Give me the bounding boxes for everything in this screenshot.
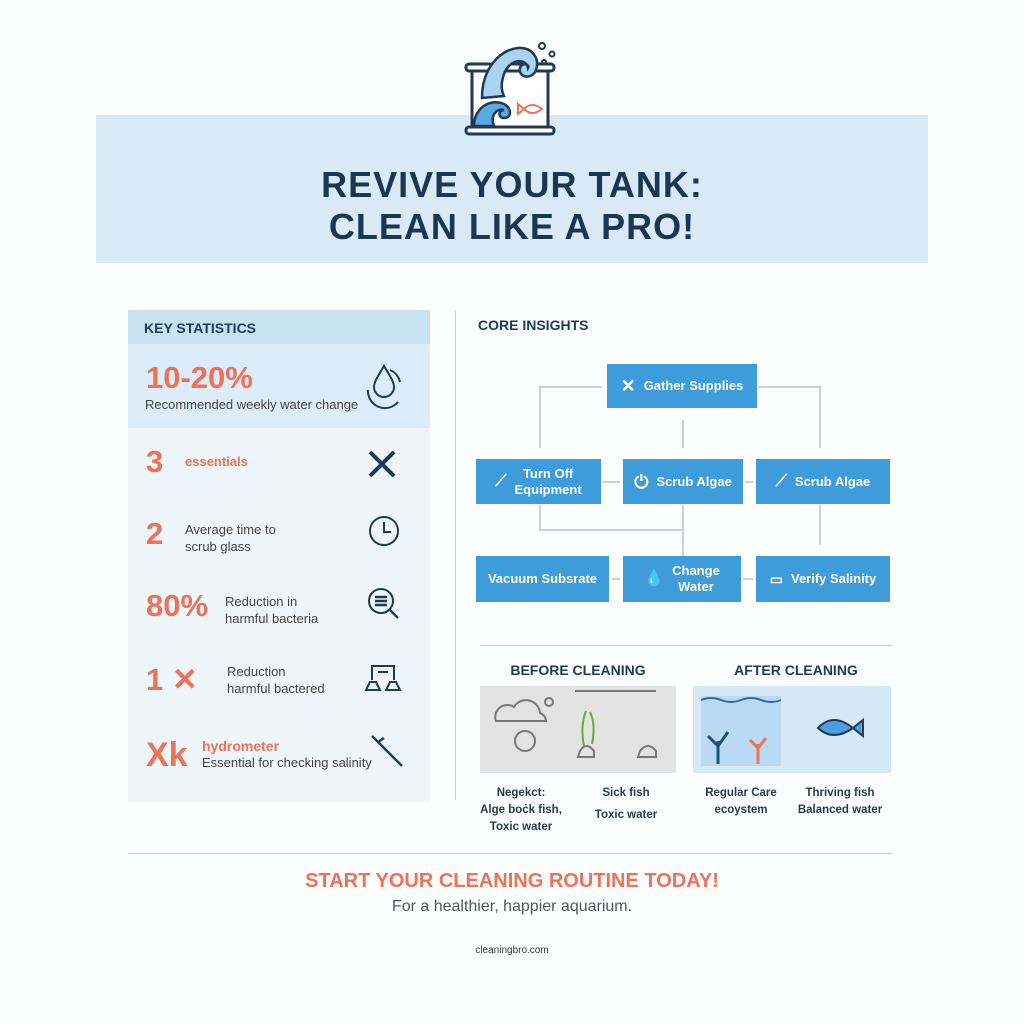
- flowchart connectors: [539, 386, 821, 580]
- box: vacuum substrate: Vacuum Subsrate: [488, 571, 597, 586]
- text: Toxic water: [595, 809, 657, 821]
- panel: key statistics: [128, 310, 430, 802]
- box: gather supplies: ✕: [621, 376, 636, 396]
- stat: 80%: [146, 588, 318, 626]
- stat: 80%: 80%: [146, 588, 208, 623]
- stat: 10-20%: 10-20%: [146, 360, 253, 395]
- stat: 1x: harmful bactered: [227, 681, 325, 696]
- title banner: [96, 115, 928, 263]
- stat: 80%: Reduction in: [225, 594, 297, 609]
- box: scrub algae 1: [623, 459, 743, 504]
- heading: key statistics: KEY STATISTICS: [144, 320, 256, 336]
- stat: 10-20%: [128, 344, 430, 428]
- box: vacuum substrate: [476, 556, 609, 602]
- box: change water: 💧: [644, 570, 664, 587]
- heading: key statistics: [128, 310, 430, 344]
- title banner: REVIVE YOUR TANK:: [321, 164, 703, 205]
- box: scrub algae 1: Scrub Algae: [656, 474, 732, 488]
- panel: before image: [480, 686, 676, 773]
- stat: 2: Average time to: [185, 522, 276, 537]
- footer url: cleaningbro.com: [475, 945, 549, 956]
- stat: 2: [146, 516, 276, 554]
- box: verify salinity: Verify Salinity: [791, 571, 876, 586]
- stat: 1x: [146, 662, 325, 697]
- stat: 1x: 1 ✕: [146, 662, 198, 697]
- stat: 3 essentials: essentials: [185, 454, 248, 469]
- stat: Xk: Essential for checking salinity: [202, 755, 372, 770]
- stat: 80%: harmful bacteria: [225, 611, 318, 626]
- stat: 3 essentials: 3: [146, 444, 163, 479]
- box: change water: [623, 556, 741, 602]
- box: turn off equipment: ⟋: [495, 472, 507, 490]
- panel: after image: [693, 686, 891, 773]
- text: ecoystem: [714, 804, 768, 816]
- title banner: CLEAN LIKE A PRO!: [329, 206, 695, 247]
- heading: before cleaning: BEFORE CLEANING: [510, 662, 646, 678]
- stat: 2: scrub glass: [185, 539, 251, 554]
- box: scrub algae 1: ⏻: [634, 472, 648, 492]
- text: Sick fish: [602, 787, 650, 799]
- call to action: START YOUR CLEANING ROUTINE TODAY!: [305, 870, 719, 892]
- box: turn off equipment: [476, 459, 601, 504]
- captions: [480, 787, 562, 833]
- stat: 2: 2: [146, 516, 163, 551]
- subtitle: For a healthier, happier aquarium.: [392, 898, 632, 915]
- box: verify salinity: [756, 556, 890, 602]
- captions: Negekct:: [497, 787, 545, 799]
- captions: Toxic water: [490, 821, 552, 833]
- box: verify salinity: ▭: [770, 571, 783, 587]
- stat: 1x: Reduction: [227, 664, 286, 679]
- box: scrub algae 2: [756, 459, 890, 504]
- box: scrub algae 2: Scrub Algae: [795, 474, 870, 488]
- stat: Xk: [146, 736, 372, 774]
- box: gather supplies: [607, 364, 757, 408]
- text: Balanced water: [798, 804, 882, 816]
- stat: 10-20%: Recommended weekly water change: [145, 397, 358, 412]
- captions: Alge boċk fish,: [480, 804, 562, 816]
- box: gather supplies: Gather Supplies: [644, 378, 743, 393]
- icon: tank with wave: [464, 42, 556, 136]
- stat: 3 essentials: [146, 444, 248, 479]
- box: turn off equipment: Turn Off: [523, 466, 573, 480]
- text: Thriving fish: [806, 787, 874, 799]
- text: Regular Care: [705, 787, 777, 799]
- divider vertical: [455, 310, 456, 800]
- heading: after cleaning: AFTER CLEANING: [734, 662, 858, 678]
- heading: core insights: CORE INSIGHTS: [478, 317, 588, 333]
- stat: Xk: Xk: [146, 736, 188, 774]
- icons: stats: [364, 364, 403, 767]
- stat: Xk: hydrometer: [202, 738, 279, 754]
- box: change water: Change: [672, 563, 720, 578]
- box: change water: Water: [678, 579, 714, 594]
- box: scrub algae 2: ⟋: [776, 472, 787, 490]
- box: turn off equipment: Equipment: [515, 482, 582, 496]
